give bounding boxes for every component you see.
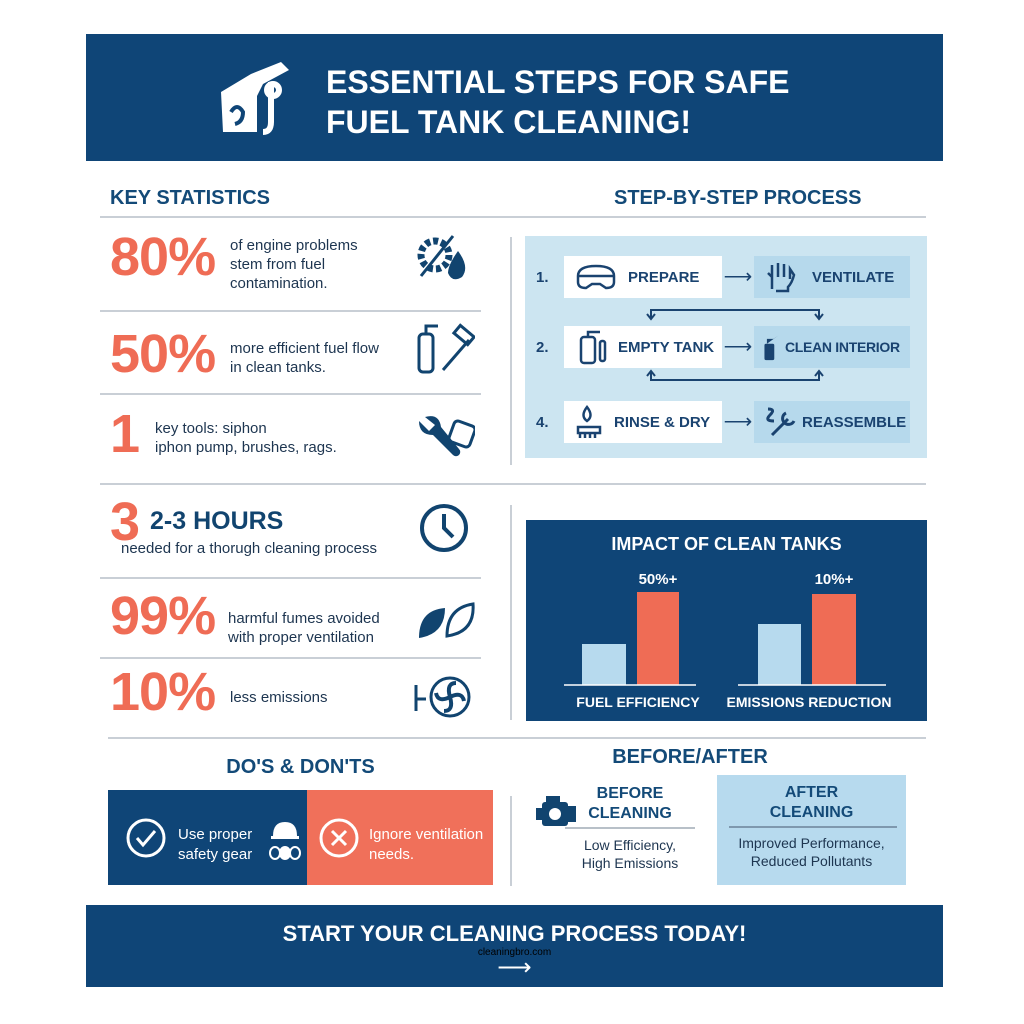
step 1 prepare xyxy=(564,256,722,298)
heading: before/after: BEFORE/AFTER xyxy=(612,746,768,768)
panel: do's: Use proper xyxy=(178,826,252,843)
stat 2-3 hours: 2-3 HOURS xyxy=(150,507,283,535)
stat 99%: 99% xyxy=(110,586,215,646)
panel: step-by-step process: 1. xyxy=(536,268,549,286)
step reassemble xyxy=(754,401,910,443)
stat 2-3 hours: 3 xyxy=(110,492,139,552)
panel: step-by-step process: 4. xyxy=(536,414,549,430)
panel: step-by-step process xyxy=(525,236,927,458)
footer banner: START YOUR CLEANING PROCESS TODAY! xyxy=(283,921,746,946)
stat 10% xyxy=(110,662,470,722)
icon: gear drop xyxy=(418,235,466,280)
panel: do's: safety gear xyxy=(178,846,252,863)
stat 50% xyxy=(110,323,475,384)
icon: extinguisher brush xyxy=(418,323,475,374)
title: ESSENTIAL STEPS FOR SAFE xyxy=(326,64,789,100)
stat 80%: of engine problems xyxy=(230,237,358,254)
stat 1 key tools: 1 xyxy=(110,404,139,464)
panel: before cleaning xyxy=(536,785,695,871)
heading: do's & don'ts: DO'S & DON'TS xyxy=(226,756,375,778)
stat 50%: more efficient fuel flow xyxy=(230,340,379,357)
bar chart xyxy=(564,571,891,710)
panel: step-by-step process: ⟶ xyxy=(724,336,752,358)
panel: before cleaning: BEFORE xyxy=(597,785,663,802)
stat 80%: stem from fuel xyxy=(230,256,325,273)
icon: leaves xyxy=(419,602,475,638)
stat 50%: 50% xyxy=(110,324,215,384)
stat 2-3 hours: needed for a thorugh cleaning process xyxy=(121,540,377,557)
step 4 rinse & dry: RINSE & DRY xyxy=(614,414,710,430)
connector arrows xyxy=(646,309,824,381)
bar chart: EMISSIONS REDUCTION xyxy=(727,694,891,710)
stat 99% xyxy=(110,586,475,646)
step clean interior xyxy=(754,326,910,368)
stat 1 key tools xyxy=(110,404,475,464)
heading: key statistics: KEY STATISTICS xyxy=(110,187,270,209)
panel: step-by-step process: 2. xyxy=(536,338,549,356)
panel: before cleaning: High Emissions xyxy=(582,855,678,871)
arrow: ⟶ xyxy=(724,266,752,288)
step 2 empty tank: EMPTY TANK xyxy=(618,338,714,356)
step 1 prepare: PREPARE xyxy=(628,268,699,286)
panel: do's xyxy=(108,790,307,885)
panel: don'ts xyxy=(307,790,493,885)
panel: after cleaning: AFTER xyxy=(785,784,838,801)
stat 10%: 10% xyxy=(110,662,215,722)
title xyxy=(326,64,789,140)
panel: step-by-step process: ⟶ xyxy=(724,411,752,433)
panel: don'ts: needs. xyxy=(369,846,414,863)
panel: impact of clean tanks chart xyxy=(526,520,927,721)
stat 10%: less emissions xyxy=(230,689,328,706)
stat 80% xyxy=(110,227,466,292)
stat 80%: contamination. xyxy=(230,275,328,292)
stat 1 key tools: key tools: siphon xyxy=(155,420,267,437)
panel: after cleaning: CLEANING xyxy=(770,804,853,821)
stat 1 key tools: iphon pump, brushes, rags. xyxy=(155,439,337,456)
heading: step-by-step: STEP-BY-STEP PROCESS xyxy=(614,187,861,209)
icon: fan xyxy=(414,676,470,718)
icon: clock xyxy=(420,504,468,552)
panel: impact of clean tanks chart: IMPACT OF CLEAN TANKS xyxy=(611,534,842,554)
footer banner xyxy=(86,905,943,987)
stat 2-3 hours xyxy=(110,492,468,557)
icon: fuel nozzle xyxy=(221,62,289,135)
panel: before cleaning: Low Efficiency, xyxy=(584,837,676,853)
panel: after cleaning: Improved Performance, xyxy=(738,835,885,851)
footer banner: cleaningbro.com xyxy=(478,947,551,958)
stat 50%: in clean tanks. xyxy=(230,359,326,376)
step reassemble: REASSEMBLE xyxy=(802,414,906,430)
panel: before cleaning: CLEANING xyxy=(588,805,672,822)
bar chart: FUEL EFFICIENCY xyxy=(576,694,700,710)
panel: don'ts: Ignore ventilation xyxy=(369,826,483,843)
step 2 empty tank xyxy=(564,326,722,368)
stat 99%: harmful fumes avoided xyxy=(228,610,380,627)
step 4 rinse & dry xyxy=(564,401,722,443)
step ventilate xyxy=(754,256,910,298)
panel: after cleaning xyxy=(717,775,906,885)
bar chart: 10%+ xyxy=(815,571,854,588)
footer banner: ⟶ xyxy=(497,954,532,981)
stat 99%: with proper ventilation xyxy=(228,629,374,646)
stat 80%: 80% xyxy=(110,227,215,287)
title: FUEL TANK CLEANING! xyxy=(326,104,691,140)
header banner xyxy=(86,34,943,161)
step clean interior: CLEAN INTERIOR xyxy=(785,339,900,355)
panel: after cleaning: Reduced Pollutants xyxy=(751,853,872,869)
bar chart: 50%+ xyxy=(639,571,678,588)
step ventilate: VENTILATE xyxy=(812,268,894,286)
icon: wrench xyxy=(419,416,475,456)
